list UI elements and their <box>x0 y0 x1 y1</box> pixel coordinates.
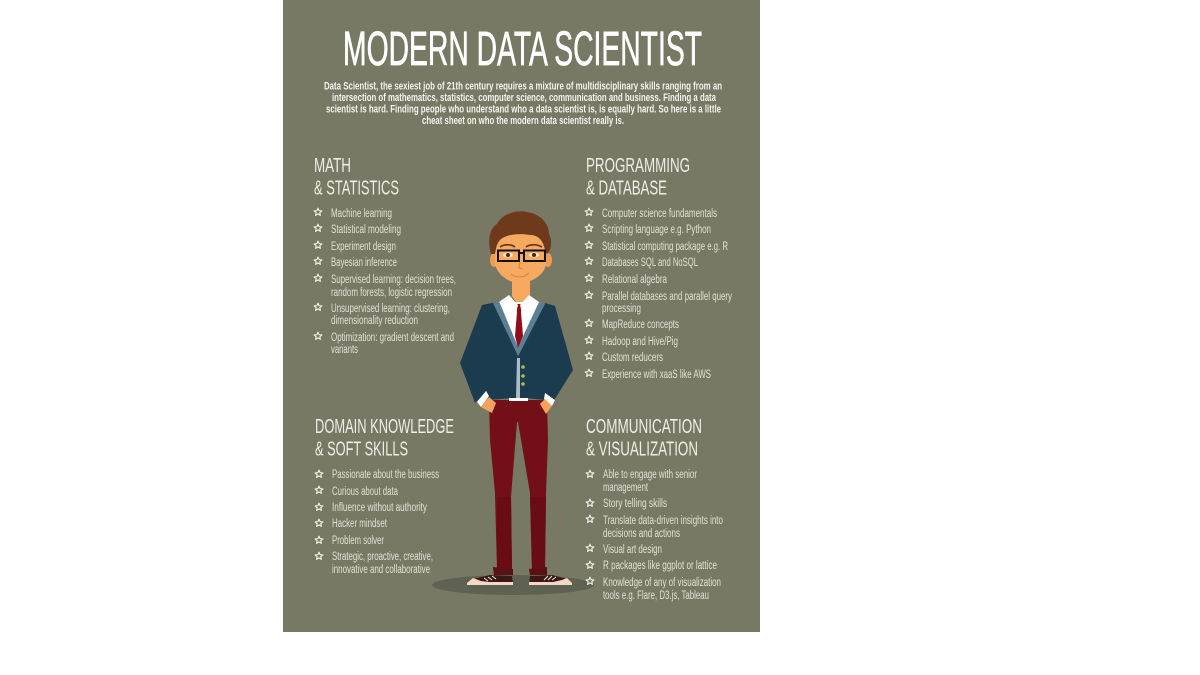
heading: math and statistics <box>314 155 399 200</box>
list: communication skills: R packages like ggplot or lattice <box>603 560 717 572</box>
list: domain skills: innovative and collaborative <box>332 564 430 576</box>
heading: domain knowledge and soft skills: DOMAIN KNOWLEDGE <box>315 416 454 438</box>
list: programming skills: MapReduce concepts <box>602 319 679 331</box>
cuffs <box>477 391 555 407</box>
list: math skills: variants <box>331 344 358 356</box>
list: math skills <box>314 208 456 356</box>
nose and mouth <box>511 262 529 277</box>
list: communication skills: Able to engage with senior <box>603 469 697 481</box>
list: domain skills: Problem solver <box>332 535 384 547</box>
list: math skills: Experiment design <box>331 241 396 253</box>
intro text block: cheat sheet on who the modern data scientist really is. <box>422 115 624 127</box>
list: domain skills: Strategic, proactive, creative, <box>332 551 433 563</box>
heading: math and statistics: MATH <box>314 155 351 177</box>
list: math skills: dimensionality reduction <box>331 315 418 327</box>
list: communication skills <box>586 469 723 602</box>
collar <box>499 295 539 318</box>
list: programming skills: Hadoop and Hive/Pig <box>602 336 678 348</box>
list: math skills: random forests, logistic regression <box>331 287 452 299</box>
list: programming skills: Computer science fundamentals <box>602 208 717 220</box>
list: math skills: Bayesian inference <box>331 257 397 269</box>
list: programming skills: Databases SQL and NoSQL <box>602 257 698 269</box>
tie <box>515 304 523 348</box>
head <box>489 211 552 283</box>
list: communication skills: decisions and actions <box>603 528 680 540</box>
intro text block <box>324 80 722 127</box>
list: math skills: Optimization: gradient descent and <box>331 332 454 344</box>
list: domain skills: Hacker mindset <box>332 518 388 530</box>
list: domain skills: Curious about data <box>332 486 398 498</box>
intro text block: Data Scientist, the sexiest job of 21th century requires a mixture of multidisciplinary skills ranging from an <box>324 80 722 92</box>
list: math skills: Unsupervised learning: clustering, <box>331 303 450 315</box>
shoes <box>467 575 572 585</box>
panel: math and statistics <box>314 155 456 356</box>
panel: domain knowledge and soft skills <box>315 416 454 576</box>
heading: programming and database: PROGRAMMING <box>586 155 690 177</box>
panel: background <box>283 0 760 632</box>
intro text block: intersection of mathematics, statistics, computer science, communication and business. Finding a data <box>332 92 717 104</box>
intro text block: scientist is hard. Finding people who understand who a data scientist is, is equally hard. So here is a little <box>326 104 721 116</box>
heading: programming and database <box>586 155 690 200</box>
illustration: data scientist figure <box>432 211 594 595</box>
list: communication skills: Knowledge of any of visualization <box>603 577 721 589</box>
neck <box>512 272 530 310</box>
list: programming skills: Custom reducers <box>602 352 663 364</box>
list: math skills: Statistical modeling <box>331 224 401 236</box>
eyes <box>503 252 539 258</box>
list: communication skills: management <box>603 482 649 494</box>
list: programming skills: Parallel databases and parallel query <box>602 291 732 303</box>
shirt <box>498 302 540 400</box>
glasses <box>498 250 545 261</box>
list: math skills: Machine learning <box>331 208 392 220</box>
list: programming skills: Relational algebra <box>602 274 667 286</box>
list: programming skills: processing <box>602 303 641 315</box>
shirt hem <box>509 398 528 401</box>
trousers <box>489 400 548 575</box>
panel: communication and visualization <box>586 416 723 602</box>
face <box>495 232 546 283</box>
ground shadow <box>432 575 594 595</box>
list: programming skills: Scripting language e.g. Python <box>602 224 711 236</box>
heading: programming and database: & DATABASE <box>586 178 667 200</box>
list: communication skills: Visual art design <box>603 544 662 556</box>
list: programming skills: Statistical computing package e.g. R <box>602 241 728 253</box>
heading: math and statistics: & STATISTICS <box>314 178 399 200</box>
heading: communication and visualization: & VISUALIZATION <box>586 438 698 460</box>
list: programming skills <box>585 208 732 381</box>
hands <box>481 397 552 414</box>
heading: communication and visualization: COMMUNICATION <box>586 416 702 438</box>
list: communication skills: Story telling skills <box>603 498 667 510</box>
list: domain skills: Passionate about the business <box>332 469 439 481</box>
list: domain skills: Influence without authority <box>332 502 427 514</box>
jacket centre opening <box>516 358 520 398</box>
heading: domain knowledge and soft skills: & SOFT SKILLS <box>315 438 408 460</box>
list: communication skills: tools e.g. Flare, D3.js, Tableau <box>603 590 709 602</box>
lapel <box>493 301 545 356</box>
heading: domain knowledge and soft skills <box>315 416 454 460</box>
panel: programming and database <box>585 155 732 381</box>
list: domain skills <box>315 469 439 576</box>
list: math skills: Supervised learning: decision trees, <box>331 274 456 286</box>
eyebrows <box>500 245 542 247</box>
jacket <box>460 302 519 403</box>
list: communication skills: Translate data-driven insights into <box>603 515 723 527</box>
title: MODERN DATA SCIENTIST <box>343 23 702 76</box>
ears <box>490 253 498 267</box>
heading: communication and visualization <box>586 416 702 460</box>
buttons <box>521 365 525 386</box>
hair <box>489 211 551 254</box>
list: programming skills: Experience with xaaS like AWS <box>602 369 711 381</box>
